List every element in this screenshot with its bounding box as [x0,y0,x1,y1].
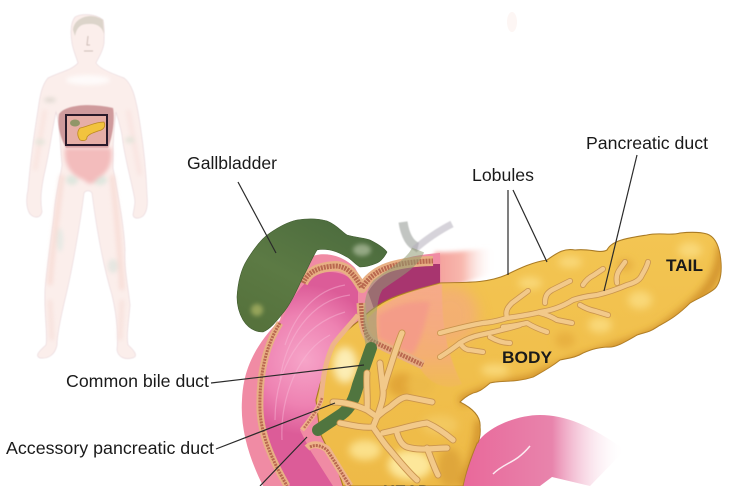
label: BODY: BODY [502,348,553,367]
hepatic duct branch left [403,222,418,247]
lower segment dashes [310,446,350,486]
common bile duct [318,348,371,430]
lower leader [260,437,307,486]
common bile duct leader [211,365,364,383]
gallbladder highlight [251,304,263,316]
upper segment [302,315,358,430]
gallbladder [237,219,387,332]
head duct outline [333,333,453,480]
peach tint on body [422,285,478,345]
body shading [35,75,140,340]
lumen fold highlights [275,285,350,440]
upper segment dashes [304,398,322,428]
duct fill [440,262,648,357]
jejunum highlight [493,446,530,474]
gallbladder leader [238,182,276,253]
label: Gallbladder: Gallbladder [187,153,277,173]
leader lines [211,155,637,486]
duodenum lumen [262,272,358,486]
organ background inside box [66,115,107,145]
pancreas thumbnail [66,115,107,145]
locator box [66,115,107,145]
pancreatic duct tree in head [333,333,453,480]
hepatic duct branch right [414,224,452,250]
green gallbladder [70,120,80,126]
label: Pancreatic duct: Pancreatic duct [586,133,708,153]
label: Lobules: Lobules [472,165,534,185]
lobules leaders [508,190,547,275]
gallbladder neck highlight [353,244,371,256]
yellow pancreas [78,122,105,141]
label: Common bile duct: Common bile duct [66,371,209,391]
duodenum outer wall [242,253,442,486]
duodenal wall along pancreatic head [302,315,358,486]
faint smudge at top [507,12,517,32]
cystic and hepatic ducts [403,222,452,250]
head hair and face [73,16,104,51]
pancreas shape [316,232,721,486]
pancreas [316,232,722,486]
translucent duct through stomach [370,250,418,345]
lower stomach wall band [361,303,423,365]
jejunum at lower right [463,415,625,486]
pancreatic duct tree in body and tail [440,262,648,357]
liver and stomach behind the box [58,105,114,148]
duodenum [242,253,442,486]
body silhouette [27,15,147,359]
pancreatic duct leader [604,155,637,291]
head duct fill [333,333,453,480]
peach translucent stomach overlay [368,284,462,387]
band tan [361,303,423,365]
lower segment [307,445,350,486]
duct outline [440,262,648,357]
band dashes [361,303,423,365]
wall bands [260,261,433,486]
human figure locator [27,15,147,359]
dark lumen of stomach [368,264,440,312]
accessory duct leader [216,403,335,449]
lobule shading [333,242,722,486]
small intestine [65,148,112,184]
label: Accessory pancreatic duct: Accessory pancreatic duct [6,438,214,458]
pink stomach interior [378,302,430,355]
label: TAIL: TAIL [666,257,703,275]
stomach fading to the right [430,248,495,292]
